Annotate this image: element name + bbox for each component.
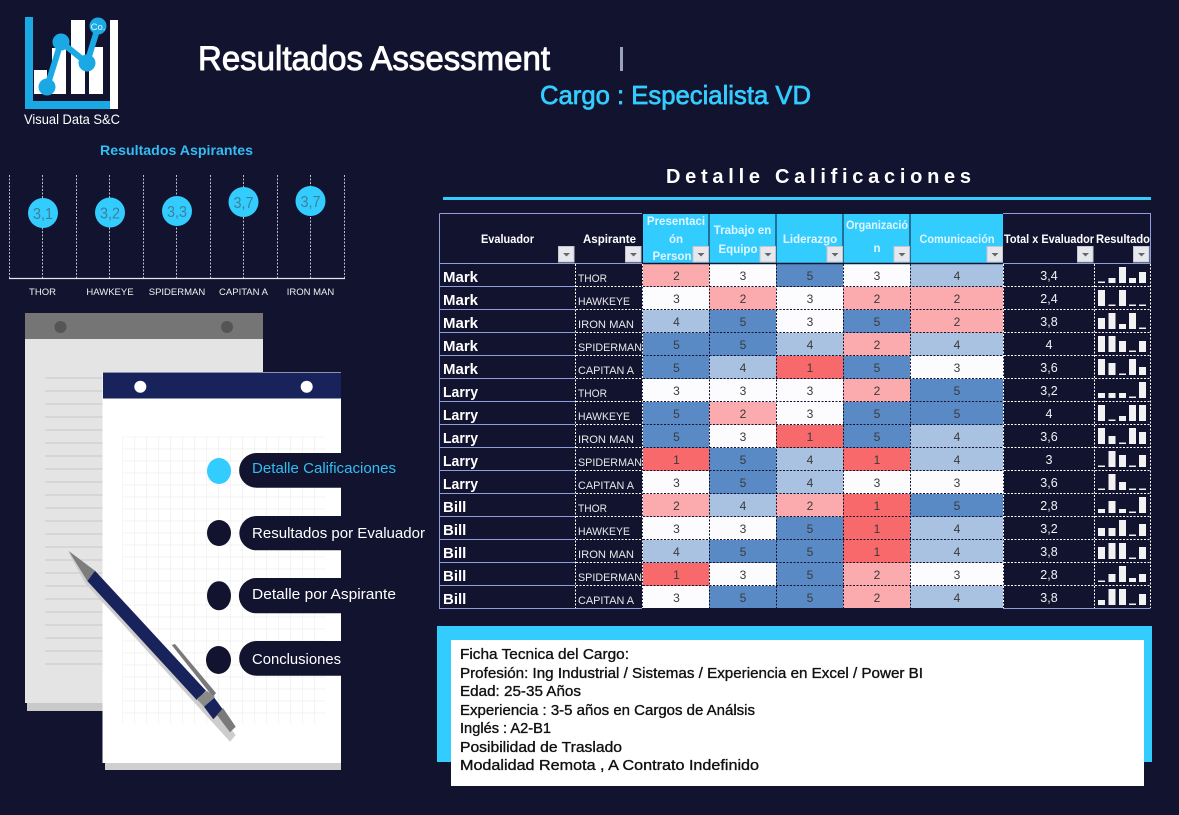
- row: Larry SPIDERMAN: SPIDERMAN: [578, 457, 642, 469]
- table header: Person: [652, 251, 692, 263]
- table: detalle calificaciones: [440, 214, 1151, 608]
- row: Larry CAPITAN A: 4: [807, 476, 814, 490]
- chart: resultados aspirantes: 3,2: [100, 206, 120, 222]
- row: Larry CAPITAN A: 3: [673, 476, 680, 490]
- row: Bill CAPITAN A: Bill: [443, 591, 466, 608]
- row: Mark THOR: 3,4: [1040, 269, 1058, 283]
- row: Larry SPIDERMAN: 4: [954, 453, 961, 467]
- row: Larry HAWKEYE: 3: [807, 407, 814, 421]
- row: Larry HAWKEYE: [443, 402, 1142, 425]
- row: Mark SPIDERMAN: 4: [807, 338, 814, 352]
- row: Bill CAPITAN A: 2: [874, 591, 881, 605]
- row: Bill CAPITAN A: CAPITAN A: [578, 595, 635, 607]
- row: Mark IRON MAN: 4: [673, 315, 680, 329]
- chart: resultados aspirantes: 3,3: [167, 204, 187, 221]
- row: Larry SPIDERMAN: Larry: [443, 453, 479, 470]
- row: Bill HAWKEYE: 5: [807, 522, 814, 536]
- menu: detalle calificaciones: [207, 453, 396, 488]
- panel: ficha tecnica: Modalidad Remota , A Contrato Indefinido: [460, 758, 759, 774]
- chart: resultados aspirantes: 3,7: [300, 194, 321, 211]
- row: Larry THOR: Larry: [443, 384, 479, 401]
- row: Bill HAWKEYE: 1: [874, 522, 881, 536]
- row: Mark IRON MAN: 5: [740, 315, 747, 329]
- row: Mark THOR: 3: [874, 269, 881, 283]
- row: Bill SPIDERMAN: 3: [954, 568, 961, 582]
- row: Mark SPIDERMAN: 5: [740, 338, 747, 352]
- row: Bill SPIDERMAN: [443, 563, 1142, 586]
- row: Bill IRON MAN: [443, 540, 1142, 563]
- row: Larry IRON MAN: 5: [874, 430, 881, 444]
- menu: detalle por aspirante: [207, 578, 396, 613]
- row: Mark THOR: 5: [807, 269, 814, 283]
- row: Larry THOR: [443, 379, 1142, 402]
- row: Larry IRON MAN: 3: [740, 430, 747, 444]
- row: Mark HAWKEYE: 2: [874, 292, 881, 306]
- row: Mark THOR: [443, 264, 1142, 287]
- icon: pen: [69, 551, 236, 742]
- menu: conclusiones: [206, 641, 341, 676]
- row: Larry HAWKEYE: 5: [673, 407, 680, 421]
- row: Larry SPIDERMAN: 5: [740, 453, 747, 467]
- row: Larry HAWKEYE: 5: [954, 407, 961, 421]
- table header: [481, 214, 1150, 263]
- chart: resultados aspirantes: 3,1: [33, 206, 53, 223]
- chart: resultados aspirantes: CAPITAN A: [219, 287, 269, 298]
- table header: Organizació: [846, 220, 908, 232]
- row: Larry THOR: 3: [807, 384, 814, 398]
- row: Mark CAPITAN A: 3,6: [1040, 361, 1058, 375]
- row: Mark IRON MAN: IRON MAN: [578, 319, 634, 331]
- row: Bill IRON MAN: 4: [954, 545, 961, 559]
- heading: resultados aspirantes: Resultados Aspirantes: [100, 142, 253, 158]
- row: Larry CAPITAN A: 3: [874, 476, 881, 490]
- logo: Visual Data S&C: Visual Data S&C: [24, 111, 120, 127]
- row: Larry CAPITAN A: 3,6: [1040, 476, 1058, 490]
- chart: resultados aspirantes: THOR: [29, 287, 56, 298]
- row: Bill THOR: Bill: [443, 499, 466, 516]
- panel: ficha tecnica: Experiencia : 3-5 años en Cargos de Análsis: [460, 703, 755, 719]
- row: Mark HAWKEYE: 2: [954, 292, 961, 306]
- title separator: [620, 47, 623, 71]
- row: Bill HAWKEYE: 4: [954, 522, 961, 536]
- table header: ón: [669, 234, 683, 246]
- row: Larry CAPITAN A: 5: [740, 476, 747, 490]
- chart: resultados aspirantes: IRON MAN: [287, 287, 334, 298]
- row: Mark IRON MAN: 3: [807, 315, 814, 329]
- row: Bill SPIDERMAN: 2,8: [1040, 568, 1058, 582]
- row: Larry SPIDERMAN: [443, 448, 1142, 471]
- row: Bill THOR: 4: [740, 499, 747, 513]
- chart: resultados aspirantes: 3,7: [234, 195, 254, 212]
- row: Bill THOR: 2,8: [1040, 499, 1058, 513]
- menu: detalle por aspirante: Detalle por Aspirante: [252, 586, 396, 603]
- row: Mark IRON MAN: 2: [954, 315, 961, 329]
- row: Bill IRON MAN: 1: [874, 545, 881, 559]
- row: Bill IRON MAN: 4: [673, 545, 680, 559]
- row: Mark SPIDERMAN: [443, 333, 1142, 356]
- row: Bill CAPITAN A: 5: [807, 591, 814, 605]
- row: Larry HAWKEYE: 5: [874, 407, 881, 421]
- row: Larry THOR: 5: [954, 384, 961, 398]
- row: Bill IRON MAN: 5: [807, 545, 814, 559]
- chart: resultados aspirantes: HAWKEYE: [86, 287, 134, 298]
- row: Larry HAWKEYE: 4: [1046, 407, 1053, 421]
- row: Mark SPIDERMAN: SPIDERMAN: [578, 342, 642, 354]
- row: Larry IRON MAN: IRON MAN: [578, 434, 634, 446]
- row: Bill IRON MAN: 3,8: [1040, 545, 1058, 559]
- table header: Trabajo en: [714, 225, 771, 237]
- row: Bill IRON MAN: IRON MAN: [578, 549, 634, 561]
- row: Mark THOR: 3: [740, 269, 747, 283]
- panel: ficha tecnica: Profesión: Ing Industrial / Sistemas / Experiencia en Excel / Power BI: [460, 666, 923, 682]
- row: Mark SPIDERMAN: 4: [1046, 338, 1053, 352]
- table header: Resultado: [1096, 234, 1150, 246]
- back notepad: [25, 313, 263, 711]
- row: Larry IRON MAN: 5: [673, 430, 680, 444]
- panel: ficha tecnica: Ficha Tecnica del Cargo:: [460, 647, 629, 663]
- row: Mark CAPITAN A: 3: [954, 361, 961, 375]
- row: Bill HAWKEYE: 3,2: [1040, 522, 1058, 536]
- row: Bill SPIDERMAN: 1: [673, 568, 680, 582]
- row: Bill SPIDERMAN: 5: [807, 568, 814, 582]
- row: Bill CAPITAN A: 4: [954, 591, 961, 605]
- heading: detalle calificaciones: Detalle Calificaciones: [666, 166, 971, 188]
- row: Mark SPIDERMAN: 2: [874, 338, 881, 352]
- row: Bill CAPITAN A: [443, 586, 1142, 608]
- row: Mark HAWKEYE: HAWKEYE: [578, 296, 630, 308]
- row: Bill HAWKEYE: Bill: [443, 522, 466, 539]
- row: Bill SPIDERMAN: SPIDERMAN: [578, 572, 642, 584]
- row: Mark CAPITAN A: [443, 356, 1142, 379]
- heading underline: [443, 197, 1151, 200]
- chart: resultados aspirantes: [9, 175, 345, 298]
- panel: ficha tecnica: Edad: 25-35 Años: [460, 684, 581, 700]
- row: Bill SPIDERMAN: Bill: [443, 568, 466, 585]
- row: Larry IRON MAN: 4: [954, 430, 961, 444]
- logo: Visual Data S&C: [24, 17, 120, 127]
- row: Mark CAPITAN A: 5: [673, 361, 680, 375]
- row: Bill HAWKEYE: [443, 517, 1142, 540]
- row: Larry THOR: 3: [740, 384, 747, 398]
- menu: resultados por evaluador: [207, 516, 425, 550]
- table header: Equipo: [719, 244, 757, 256]
- table header: Total x Evaluador: [1004, 234, 1094, 246]
- row: Larry IRON MAN: [443, 425, 1142, 448]
- row: Bill SPIDERMAN: 2: [874, 568, 881, 582]
- row: Bill SPIDERMAN: 3: [740, 568, 747, 582]
- row: Larry THOR: 2: [874, 384, 881, 398]
- row: Mark CAPITAN A: Mark: [443, 361, 479, 378]
- row: Mark THOR: 4: [954, 269, 961, 283]
- table header: Aspirante: [583, 234, 636, 246]
- row: Larry CAPITAN A: 3: [954, 476, 961, 490]
- panel: ficha tecnica: [437, 626, 1152, 786]
- row: Mark CAPITAN A: 4: [740, 361, 747, 375]
- logo: Visual Data S&C: Co.: [91, 22, 105, 33]
- row: Larry IRON MAN: Larry: [443, 430, 479, 447]
- row: Bill CAPITAN A: 3: [673, 591, 680, 605]
- row: Larry HAWKEYE: 2: [740, 407, 747, 421]
- row: Larry CAPITAN A: Larry: [443, 476, 479, 493]
- row: Larry HAWKEYE: Larry: [443, 407, 479, 424]
- row: Bill THOR: 5: [954, 499, 961, 513]
- row: Mark SPIDERMAN: Mark: [443, 338, 479, 355]
- table header: Comunicación: [920, 234, 994, 246]
- row: Larry CAPITAN A: [443, 471, 1142, 494]
- row: Larry THOR: 3: [673, 384, 680, 398]
- row: Larry THOR: THOR: [578, 388, 607, 400]
- row: Bill THOR: THOR: [578, 503, 607, 515]
- row: Mark THOR: THOR: [578, 273, 607, 285]
- row: Bill THOR: 2: [673, 499, 680, 513]
- row: Mark IRON MAN: Mark: [443, 315, 479, 332]
- row: Larry CAPITAN A: CAPITAN A: [578, 480, 635, 492]
- row: Larry SPIDERMAN: 3: [1046, 453, 1053, 467]
- row: Mark HAWKEYE: 3: [673, 292, 680, 306]
- row: Larry IRON MAN: 3,6: [1040, 430, 1058, 444]
- row: Bill CAPITAN A: 5: [740, 591, 747, 605]
- row: Mark CAPITAN A: 5: [874, 361, 881, 375]
- row: Mark HAWKEYE: 3: [807, 292, 814, 306]
- row: Mark SPIDERMAN: 4: [954, 338, 961, 352]
- row: Mark IRON MAN: 3,8: [1040, 315, 1058, 329]
- panel: ficha tecnica: Posibilidad de Traslado: [460, 740, 622, 756]
- row: Larry HAWKEYE: HAWKEYE: [578, 411, 630, 423]
- title: Resultados Assessment: [198, 40, 551, 78]
- row: Bill CAPITAN A: 3,8: [1040, 591, 1058, 605]
- row: Larry SPIDERMAN: 1: [874, 453, 881, 467]
- row: Bill THOR: 1: [874, 499, 881, 513]
- row: Bill HAWKEYE: 3: [673, 522, 680, 536]
- row: Larry SPIDERMAN: 1: [673, 453, 680, 467]
- row: Mark HAWKEYE: Mark: [443, 292, 479, 309]
- row: Mark IRON MAN: [443, 310, 1142, 333]
- row: Mark HAWKEYE: [443, 287, 1142, 310]
- front notepad: [102, 372, 341, 770]
- row: Mark CAPITAN A: 1: [807, 361, 814, 375]
- table header: Evaluador: [481, 234, 534, 246]
- row: Mark THOR: Mark: [443, 269, 479, 286]
- menu: conclusiones: Conclusiones: [252, 651, 341, 668]
- row: Bill IRON MAN: Bill: [443, 545, 466, 562]
- row: Bill THOR: [443, 494, 1142, 517]
- subtitle: cargo: Cargo : Especialista VD: [540, 80, 811, 110]
- row: Mark THOR: 2: [673, 269, 680, 283]
- row: Mark IRON MAN: 5: [874, 315, 881, 329]
- table header: Liderazgo: [783, 234, 837, 246]
- row: Bill THOR: 2: [807, 499, 814, 513]
- row: Larry SPIDERMAN: 4: [807, 453, 814, 467]
- row: Bill IRON MAN: 5: [740, 545, 747, 559]
- row: Bill HAWKEYE: HAWKEYE: [578, 526, 630, 538]
- chart: resultados aspirantes: SPIDERMAN: [149, 287, 205, 298]
- row: Bill HAWKEYE: 3: [740, 522, 747, 536]
- menu: resultados por evaluador: Resultados por Evaluador: [252, 525, 425, 542]
- table header: Presentaci: [647, 216, 705, 228]
- row: Mark SPIDERMAN: 5: [673, 338, 680, 352]
- panel: ficha tecnica: Inglés : A2-B1: [460, 721, 551, 737]
- row: Mark CAPITAN A: CAPITAN A: [578, 365, 635, 377]
- row: Mark HAWKEYE: 2: [740, 292, 747, 306]
- row: Larry IRON MAN: 1: [807, 430, 814, 444]
- row: Larry THOR: 3,2: [1040, 384, 1058, 398]
- row: Mark HAWKEYE: 2,4: [1040, 292, 1058, 306]
- table header: n: [873, 243, 881, 255]
- menu: detalle calificaciones: Detalle Calificaciones: [252, 460, 396, 477]
